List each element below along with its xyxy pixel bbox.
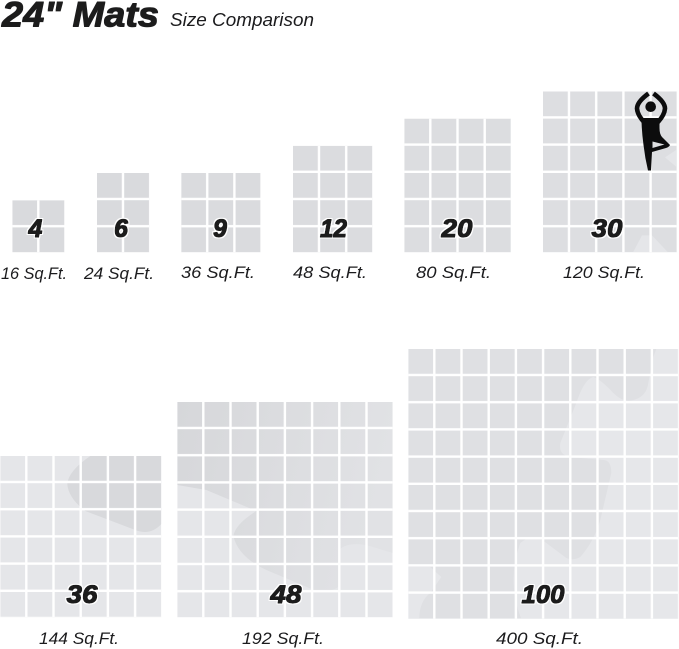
- icon: tree pose figure: [637, 94, 670, 170]
- mat: 4 tiles: [1, 200, 67, 283]
- mat: 48 tiles: 48: [269, 581, 302, 609]
- mat: 9 tiles: 9: [213, 215, 227, 243]
- mat: 36 tiles: 144 Sq.Ft.: [39, 629, 119, 648]
- mat: 20 tiles: 20: [440, 215, 473, 243]
- mat: 30 tiles: [543, 91, 677, 282]
- mat: 48 tiles: 192 Sq.Ft.: [242, 629, 324, 648]
- mat: 36 tiles: 36: [66, 581, 99, 609]
- mat: 12 tiles: [293, 146, 372, 282]
- title: [1, 0, 314, 34]
- mat: 9 tiles: [181, 173, 261, 282]
- mat: 36 tiles: [0, 456, 161, 648]
- mat: 48 tiles: [177, 402, 393, 648]
- mat: 4 tiles: 4: [28, 215, 42, 243]
- mat: 30 tiles: 30: [592, 215, 623, 243]
- mat: 6 tiles: [83, 173, 154, 283]
- mat: 30 tiles: 120 Sq.Ft.: [563, 263, 645, 282]
- mat: 100 tiles: [408, 349, 678, 648]
- mat: 4 tiles: 16 Sq.Ft.: [1, 264, 67, 283]
- mat: 20 tiles: 80 Sq.Ft.: [416, 263, 491, 282]
- mat: 12 tiles: 48 Sq.Ft.: [293, 263, 367, 282]
- mat: 9 tiles: 36 Sq.Ft.: [181, 263, 255, 282]
- mat: 6 tiles: 6: [114, 215, 129, 243]
- mat: 6 tiles: 24 Sq.Ft.: [83, 264, 154, 283]
- subheading: size comparison: Size Comparison: [170, 10, 314, 30]
- mat: 20 tiles: [404, 119, 511, 282]
- mat: 12 tiles: 12: [320, 215, 347, 243]
- mat: 100 tiles: 100: [522, 581, 565, 609]
- mat: 100 tiles: 400 Sq.Ft.: [496, 629, 583, 648]
